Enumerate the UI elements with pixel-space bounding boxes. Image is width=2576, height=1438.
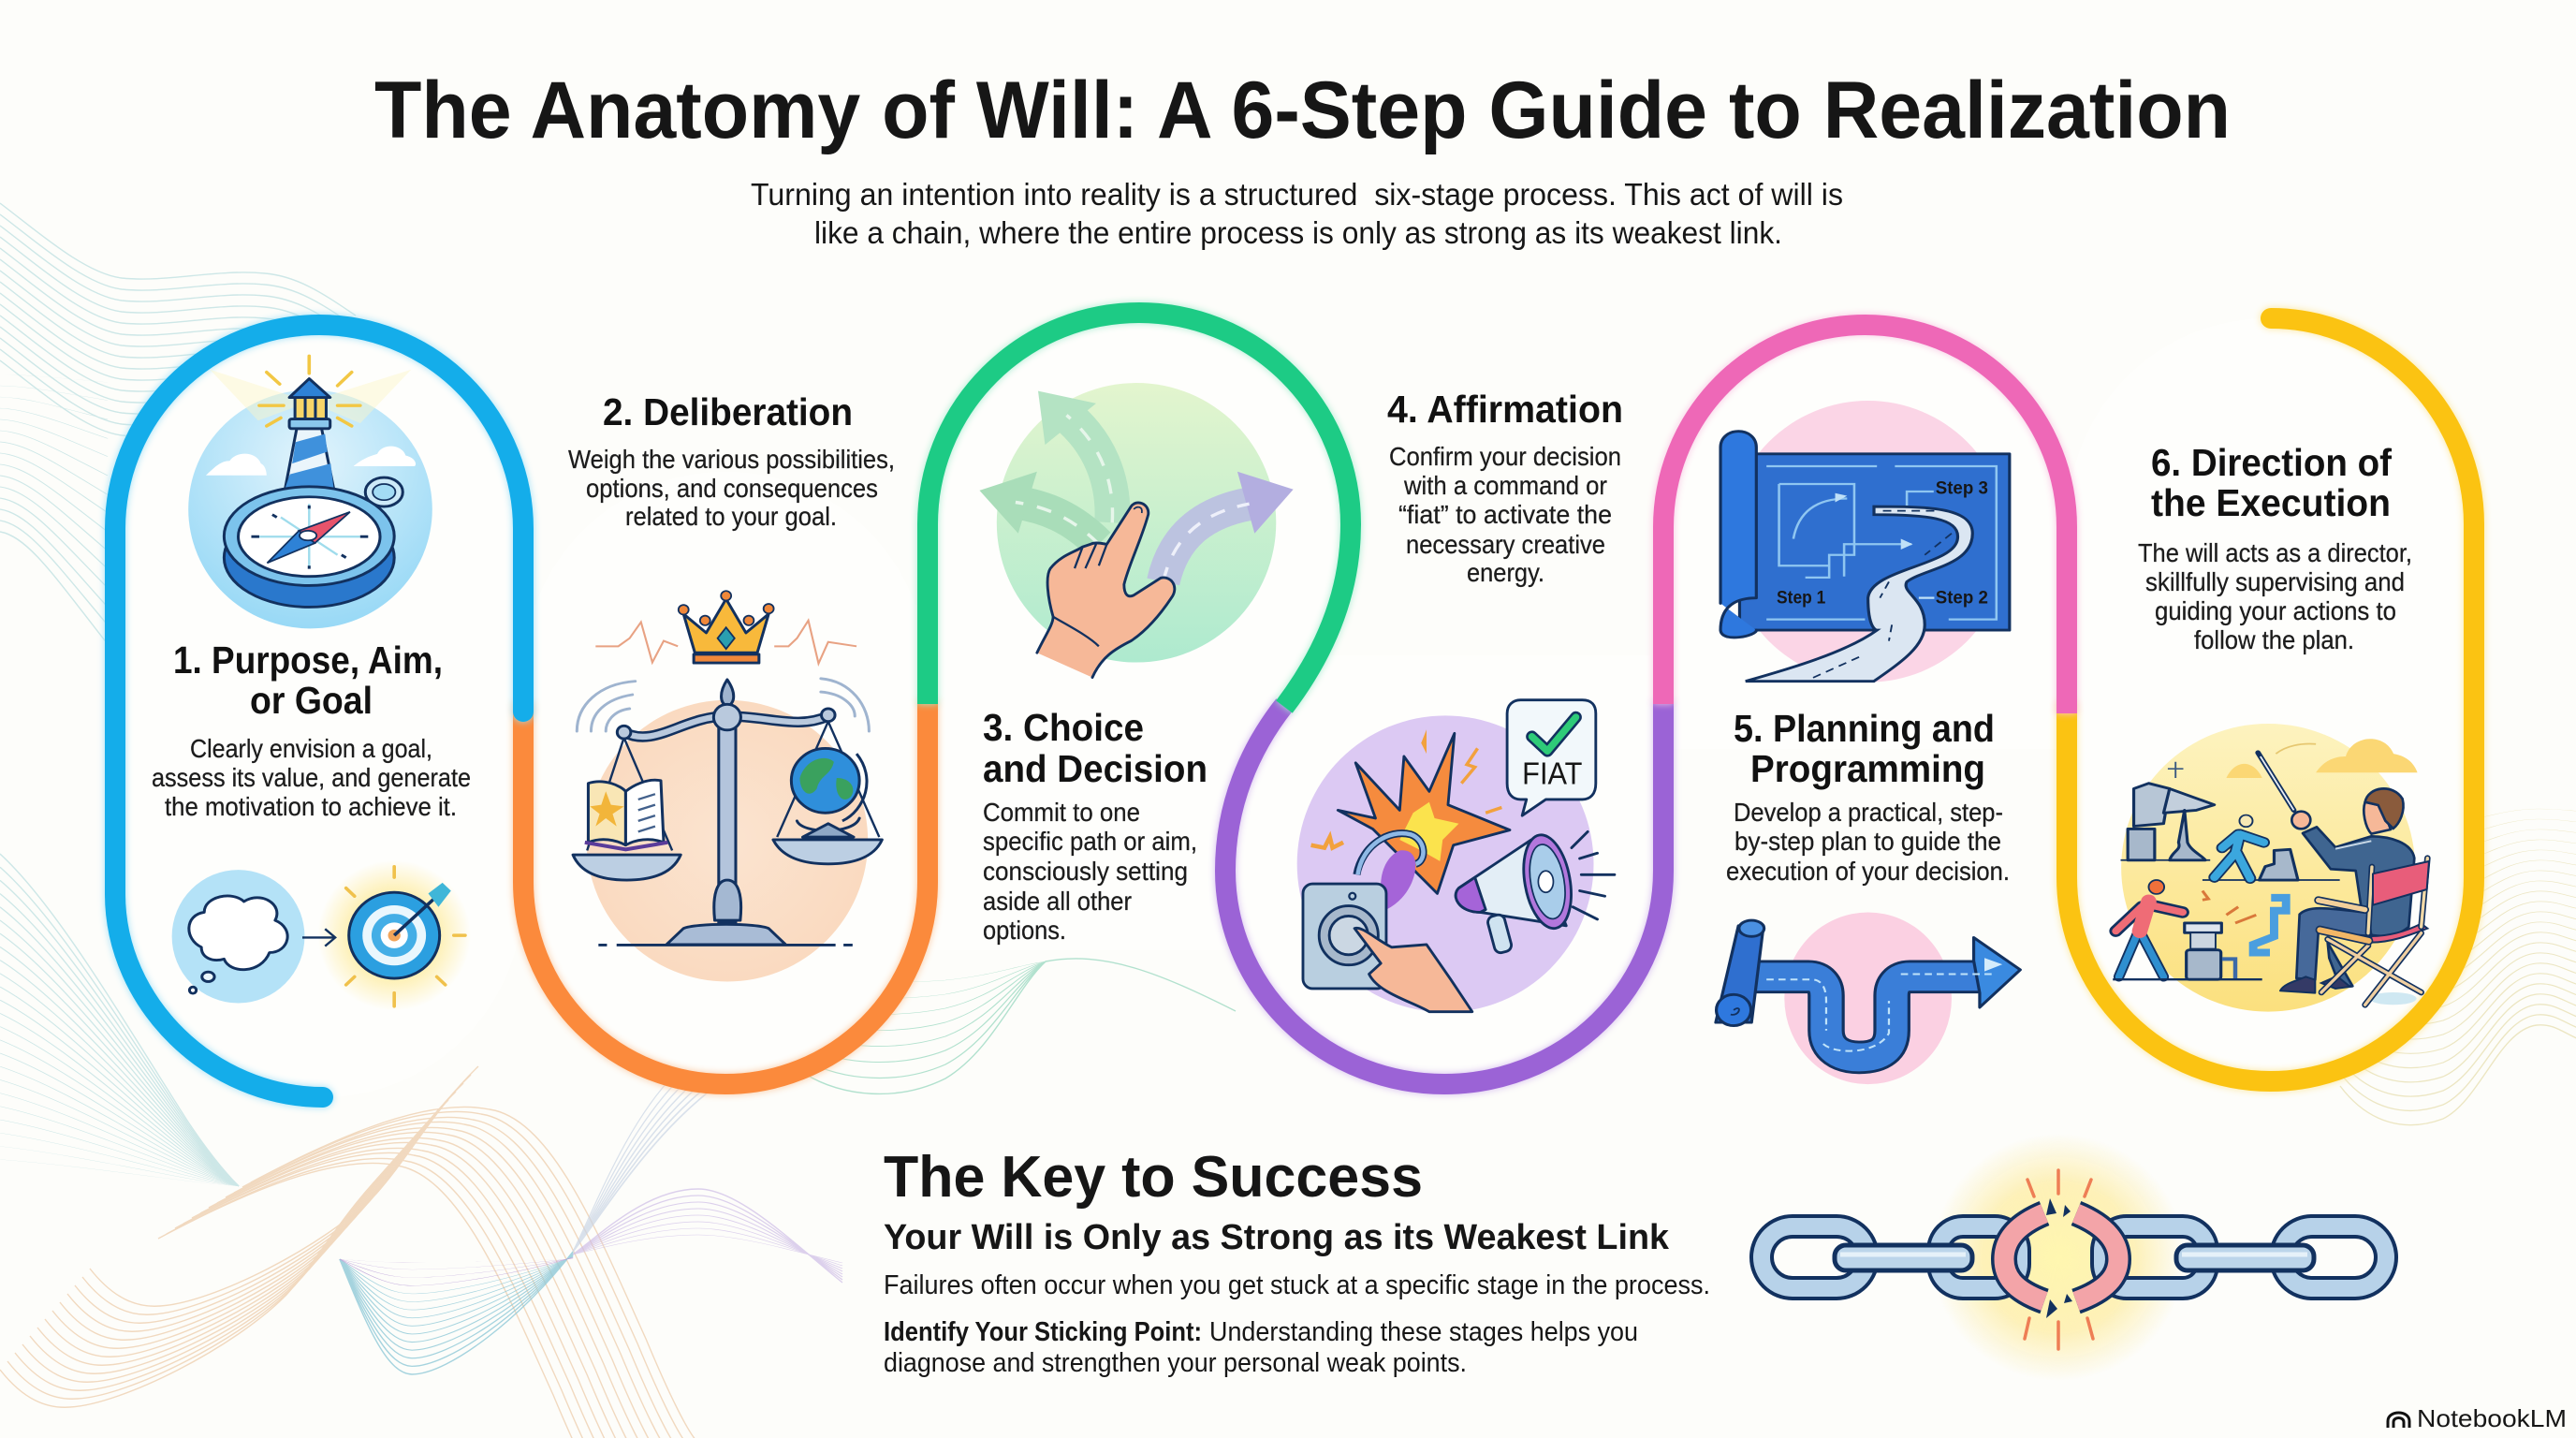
heading: step 1: 1. Purpose, Aim, (173, 638, 443, 682)
heading: step 1: or Goal (250, 679, 373, 722)
subheading: weakest link: Your Will is Only as Strong as its Weakest Link (884, 1218, 1670, 1257)
icon: director in a folding chair (2280, 788, 2429, 1005)
heading: step 4: 4. Affirmation (1387, 388, 1623, 431)
panel: step 5 planning and programming (1716, 401, 2020, 1084)
text: step 1 description (152, 734, 471, 821)
icon: blueprint with road (1720, 401, 2010, 682)
icon: broken chain (1762, 1134, 2386, 1381)
heading: step 2: 2. Deliberation (603, 390, 853, 433)
subtitle: Turning an intention into reality is a structured six-stage process. This act of will is (751, 178, 1843, 213)
text: step 4 description (1389, 442, 1621, 587)
text: step 6 description: The will acts as a director, (2138, 538, 2412, 567)
icon: workers carrying out the plan (2113, 724, 2418, 1012)
icon: hand choosing a path (979, 383, 1294, 678)
text: step 6 description: guiding your actions to (2155, 596, 2396, 625)
text: step 4 description: Confirm your decision (1389, 442, 1621, 471)
text: step 6 description: skillfully supervising and (2145, 567, 2405, 596)
heading: step 6: 6. Direction of (2151, 441, 2392, 484)
heading: step 3 (983, 706, 1208, 790)
text: step 5 description: Develop a practical, step- (1734, 798, 2003, 827)
logo: NotebookLM: NotebookLM (2417, 1404, 2567, 1432)
text: step 4 description: “fiat” to activate the (1398, 500, 1612, 529)
text: step 1 description: the motivation to achieve it. (165, 792, 457, 821)
panel: the key to success (884, 1134, 2386, 1381)
panel: step 1 purpose (152, 356, 471, 1010)
text: step 3 description: specific path or aim, (983, 827, 1197, 856)
text: step 2 description: related to your goal. (625, 502, 837, 531)
text: step 2 description: Weigh the various possibilities, (568, 445, 895, 474)
text: step 4 description: energy. (1467, 558, 1544, 587)
panel: step 4 affirmation (1297, 388, 1623, 1012)
text: step 5 description: execution of your decision. (1726, 857, 2010, 886)
panel: step 2 deliberation (568, 390, 895, 981)
text: step 3 description: options. (983, 916, 1066, 945)
text: step 6 description: follow the plan. (2194, 625, 2354, 654)
text: step 3 description: Commit to one (983, 798, 1140, 827)
text: sticking point: Understanding these stages helps you (1209, 1317, 1638, 1347)
subtitle: like a chain, where the entire process is only as strong as its weakest link. (814, 216, 1782, 251)
text: step 6 description (2138, 538, 2412, 654)
icon: blueprint with road: Step 2 (1936, 588, 1988, 608)
text: step 5 description: by-step plan to guide the (1734, 827, 2001, 856)
text: failures: Failures often occur when you get stuck at a specific stage in the process. (884, 1270, 1710, 1300)
heading: step 6: the Execution (2151, 481, 2391, 524)
heading: step 6 (2151, 441, 2392, 524)
icon: fiat button, burst and megaphone: FIAT (1522, 756, 1582, 791)
panel: step 3 choice and decision (979, 383, 1294, 945)
text: step 2 description (568, 445, 895, 531)
text: step 5 description (1726, 798, 2010, 886)
text: step 3 description (983, 798, 1197, 945)
panel: step 6 direction of the execution (2113, 441, 2429, 1012)
text: sticking point: Identify Your Sticking Point: (884, 1317, 1202, 1347)
text: sticking point: diagnose and strengthen your personal weak points. (884, 1348, 1467, 1378)
heading: step 5: 5. Planning and (1734, 707, 1995, 750)
text: step 3 description: consciously setting (983, 857, 1188, 886)
text: step 3 description: aside all other (983, 887, 1132, 916)
heading: step 3: 3. Choice (983, 706, 1144, 749)
text: step 1 description: Clearly envision a goal, (190, 734, 432, 763)
heading: key to success: The Key to Success (884, 1145, 1423, 1210)
icon: winding arrow from a rolled plan (1716, 912, 2020, 1084)
text: step 1 description: assess its value, and generate (152, 763, 471, 792)
icon: lighthouse and compass (188, 356, 432, 628)
heading: step 1 (173, 638, 443, 722)
icon: blueprint with road: Step 1 (1777, 588, 1825, 608)
icon: thought cloud to target (172, 860, 471, 1010)
heading: step 5: Programming (1750, 747, 1985, 790)
text: step 4 description: with a command or (1403, 471, 1607, 500)
text: step 2 description: options, and consequences (586, 474, 878, 503)
icon: blueprint with road: Step 3 (1936, 478, 1988, 498)
heading: step 3: and Decision (983, 747, 1208, 790)
text: sticking point (884, 1317, 1638, 1378)
ribbon connecting the six steps (115, 313, 2474, 1097)
title: The Anatomy of Will: A 6-Step Guide to Realization (374, 66, 2231, 155)
icon: balance scale with crown, book and globe (573, 591, 882, 981)
icon: fiat button, burst and megaphone (1297, 700, 1615, 1012)
heading: step 5 (1734, 707, 1995, 790)
subtitle (751, 178, 1843, 251)
text: step 4 description: necessary creative (1406, 530, 1605, 559)
